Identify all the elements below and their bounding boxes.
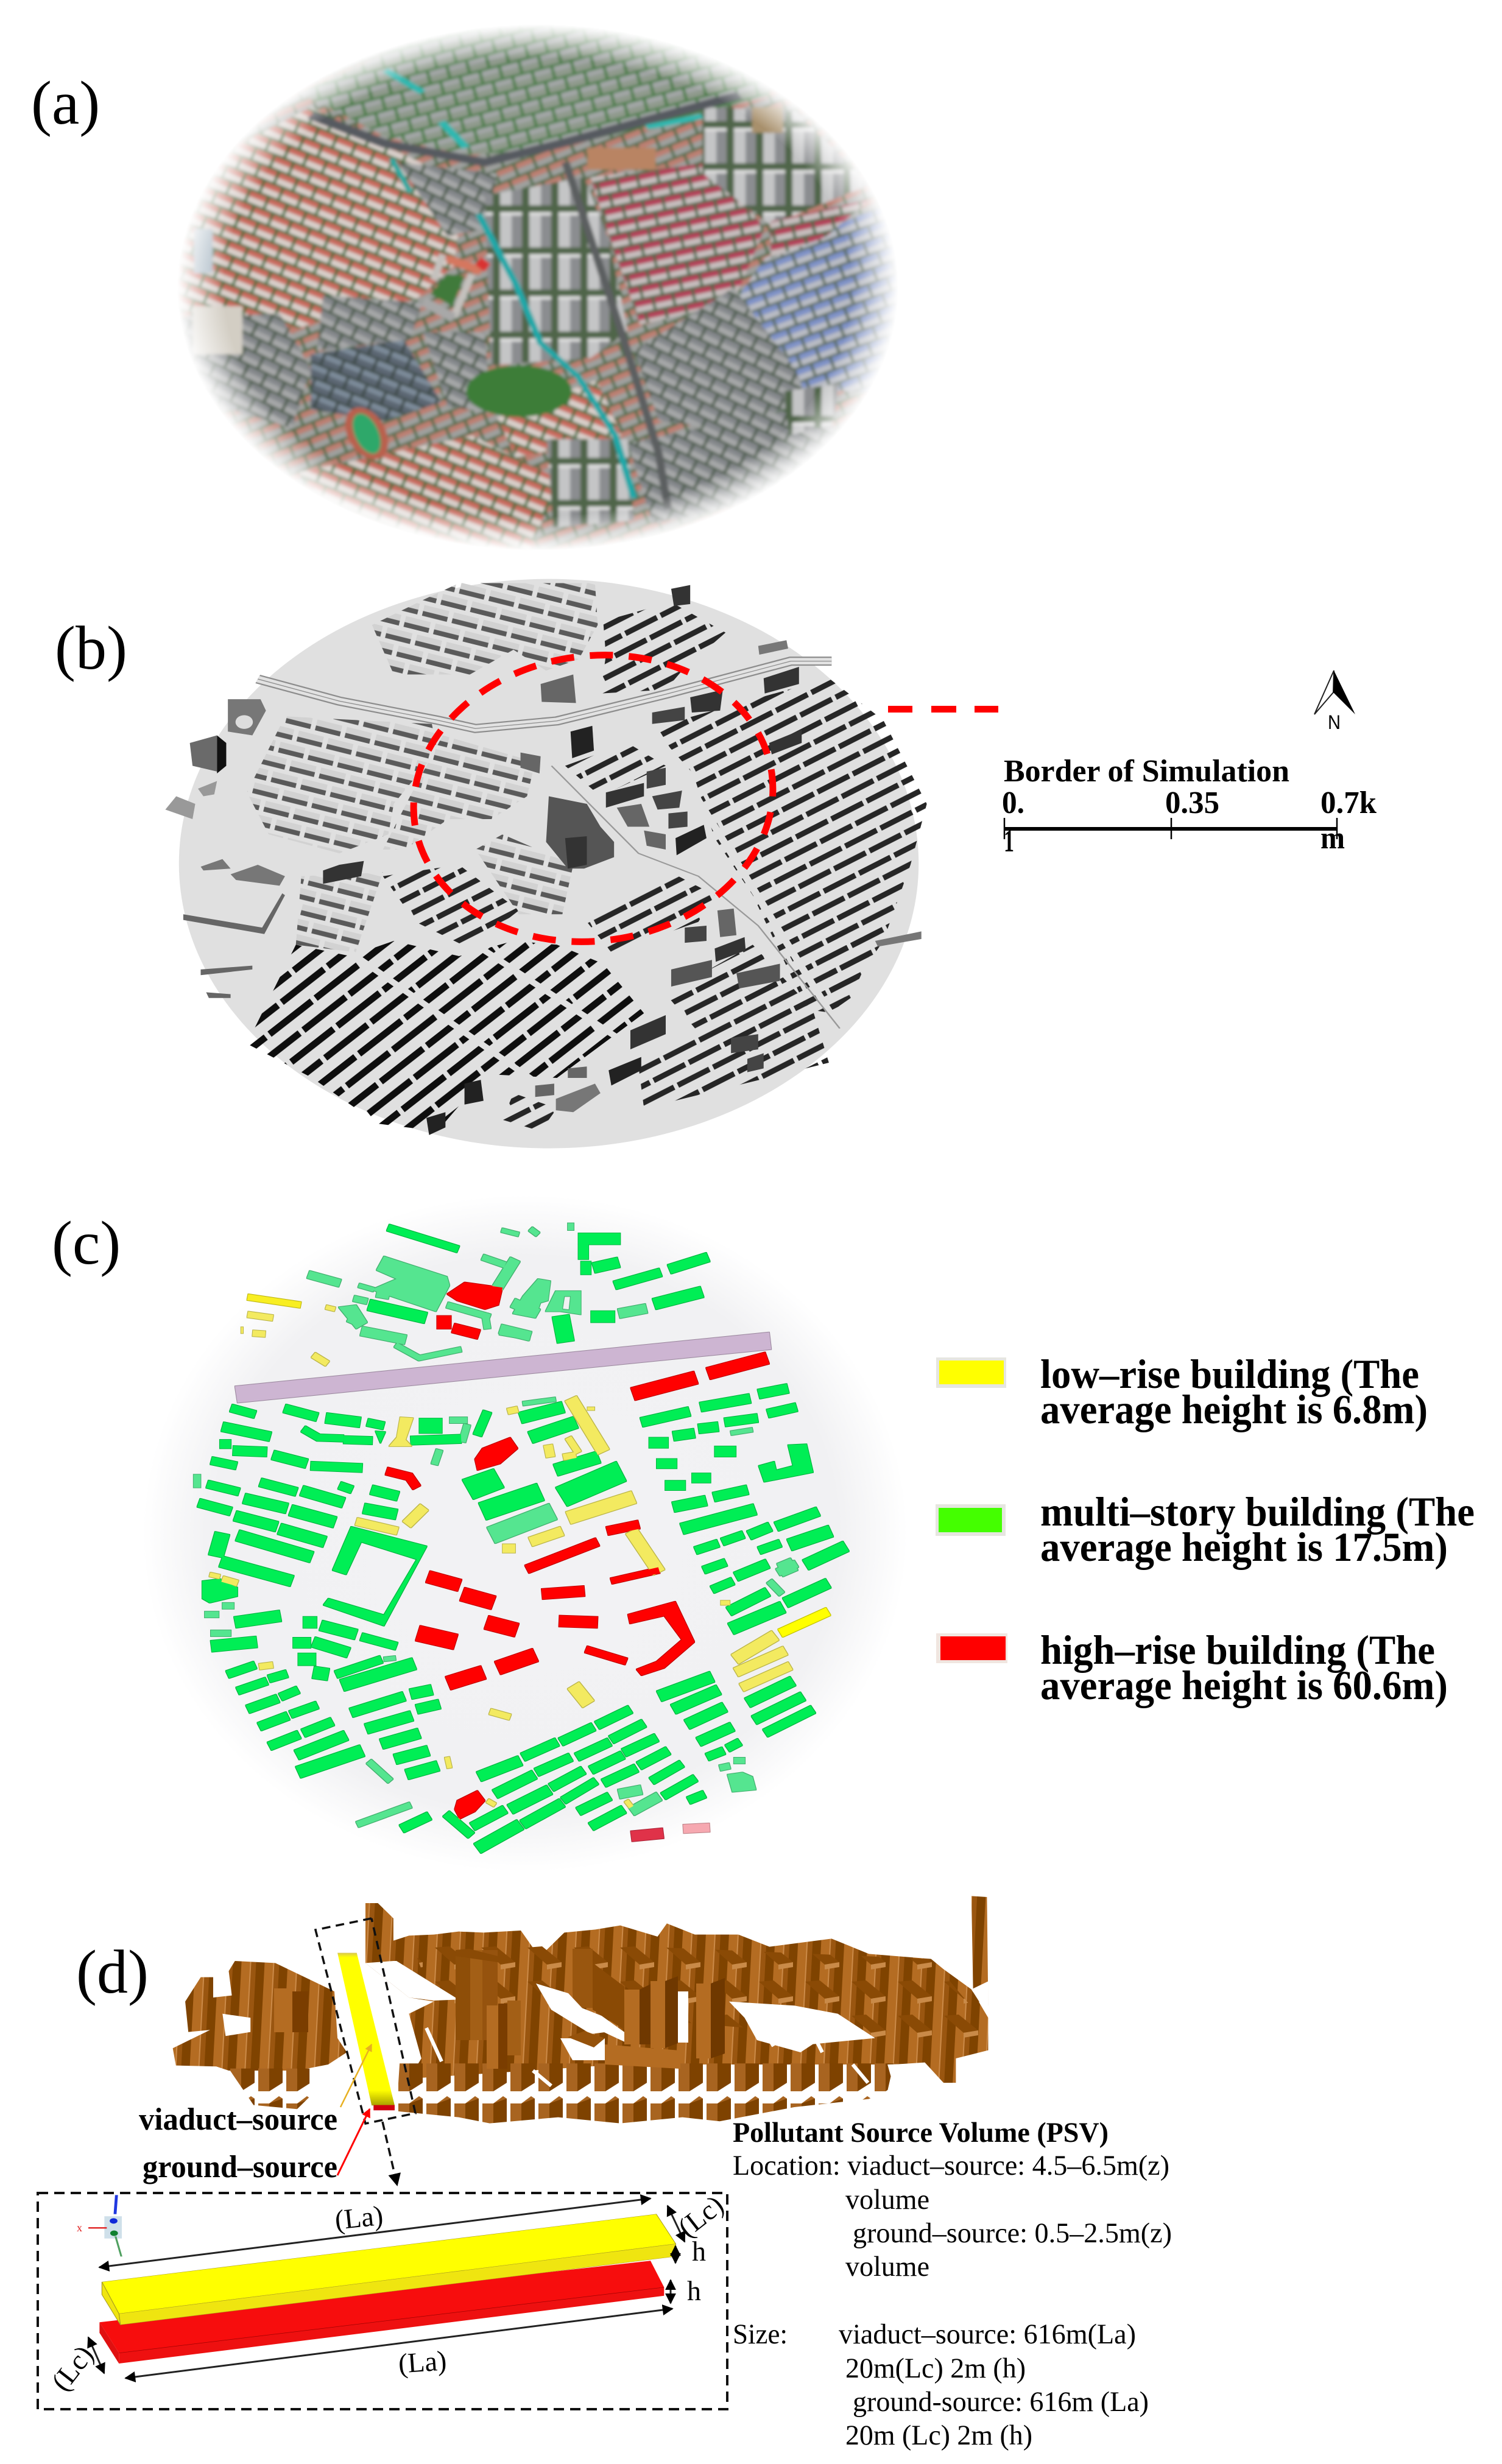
dimension arrows: [88, 2198, 685, 2378]
legend: low-rise building: average height is 6.8m): [1040, 1386, 1428, 1432]
ground source bar: [99, 2261, 664, 2364]
legend: multi-story building: [936, 1488, 1475, 1570]
viaduct band: [235, 1332, 771, 1403]
panel a: aerial city photo: [180, 26, 895, 548]
panel c: building height classes map: [143, 1195, 908, 1872]
icon: north arrow: N: [1328, 711, 1341, 733]
dimension labels: (La): [397, 2345, 448, 2379]
text block: pollutant source volume: Size:: [733, 2318, 788, 2350]
streets: [285, 713, 840, 1093]
heading: panel a label: (a): [31, 69, 100, 138]
ground disc: [179, 579, 918, 1149]
west cluster: [173, 1961, 347, 2071]
gaps between blocks: [222, 1961, 988, 2087]
heading: panel c label: (c): [52, 1209, 121, 1278]
text block: pollutant source volume: 20m(Lc) 2m (h): [845, 2353, 1026, 2384]
label: viaduct source: viaduct–source: [139, 2102, 337, 2137]
simulation border: red dashed ellipse: [395, 632, 792, 965]
pollutant source detail box: [38, 2193, 727, 2409]
main mass: [365, 1903, 988, 2083]
scale bar with title: 0.: [1002, 786, 1024, 820]
dimension labels: h: [692, 2236, 706, 2267]
panel b: 3D grey building model: [165, 579, 927, 1149]
scale bar with title: m: [1320, 821, 1345, 856]
text block: pollutant source volume: volume: [845, 2251, 929, 2283]
x axis letter: x: [77, 2222, 82, 2234]
text block: pollutant source volume: ground-source: 616m (La): [853, 2386, 1149, 2418]
legend: multi-story building: multi–story building (The: [1040, 1488, 1475, 1535]
large towers: [165, 585, 922, 1135]
viaduct source volume: yellow bar with red base: [337, 1953, 395, 2110]
lower short blocks: [397, 2063, 894, 2124]
panel d: brown 3D simulation buildings: [173, 1896, 988, 2124]
legend: high-rise building: average height is 60.6m): [1040, 1662, 1448, 1708]
courtyard building: [423, 255, 487, 318]
text block: pollutant source volume: 20m (Lc) 2m (h): [845, 2420, 1032, 2451]
dashed selection around source: [316, 1918, 415, 2124]
legend: high-rise building: [936, 1627, 1448, 1708]
building rows: [247, 583, 927, 1132]
dimension labels: (Lc): [45, 2340, 99, 2396]
text block: pollutant source volume: viaduct–source: 616m(La): [839, 2318, 1136, 2350]
text block: pollutant source volume: Location: viaduct–source: 4.5–6.5m(z): [733, 2150, 1169, 2181]
label: ground source: ground–source: [143, 2150, 337, 2184]
red buildings: [386, 1322, 767, 1683]
arrow: viaduct source pointer: [340, 2044, 372, 2107]
text block: pollutant source volume: volume: [845, 2184, 929, 2216]
text block: pollutant source volume: [733, 2117, 1172, 2451]
dimension labels: (La): [333, 2200, 384, 2236]
text block: pollutant source volume: ground–source: 0.5–2.5m(z): [853, 2217, 1172, 2249]
yellow buildings: [210, 1297, 828, 1807]
heading: panel d label: (d): [76, 1938, 149, 2007]
map shapes: [197, 1223, 846, 1848]
dimension labels: h: [687, 2275, 701, 2306]
legend: low-rise building: [936, 1351, 1428, 1432]
source volumes: yellow and red bars: [88, 2195, 675, 2364]
legend: high-rise building: high–rise building (The: [1040, 1627, 1435, 1673]
legend: low-rise building: low–rise building (The: [1040, 1351, 1419, 1397]
arrow: ground source pointer: [337, 2109, 370, 2175]
dimension labels: [45, 2189, 729, 2396]
scale bar with title: [1002, 754, 1377, 859]
scale bar with title: 1: [1004, 824, 1014, 859]
icon: north arrow: [1314, 671, 1355, 733]
text block: pollutant source volume: Pollutant Source Volume (PSV): [733, 2117, 1109, 2149]
soft grey disc: [143, 1195, 908, 1872]
scale bar with title: 0.35: [1165, 786, 1219, 820]
roof tops: [409, 1937, 981, 2050]
dimension labels: (Lc): [672, 2189, 729, 2243]
viaduct: [258, 661, 831, 728]
axis gizmo: [88, 2195, 122, 2256]
far tower: [971, 1896, 988, 2005]
scale bar with title: 0.7k: [1320, 786, 1377, 820]
arrow: dashed link to source detail: [383, 2122, 397, 2185]
heading: panel b label: (b): [55, 614, 127, 683]
bright green buildings: [199, 1228, 846, 1848]
towers in page coordinates: [274, 1949, 868, 2086]
light green buildings: [197, 1223, 797, 1825]
legend dash: border of simulation: [888, 706, 998, 713]
viaduct source bar: [102, 2214, 675, 2325]
legend: multi-story building: average height is 17.5m): [1040, 1524, 1448, 1570]
scale bar with title: Border of Simulation: [1004, 754, 1289, 789]
